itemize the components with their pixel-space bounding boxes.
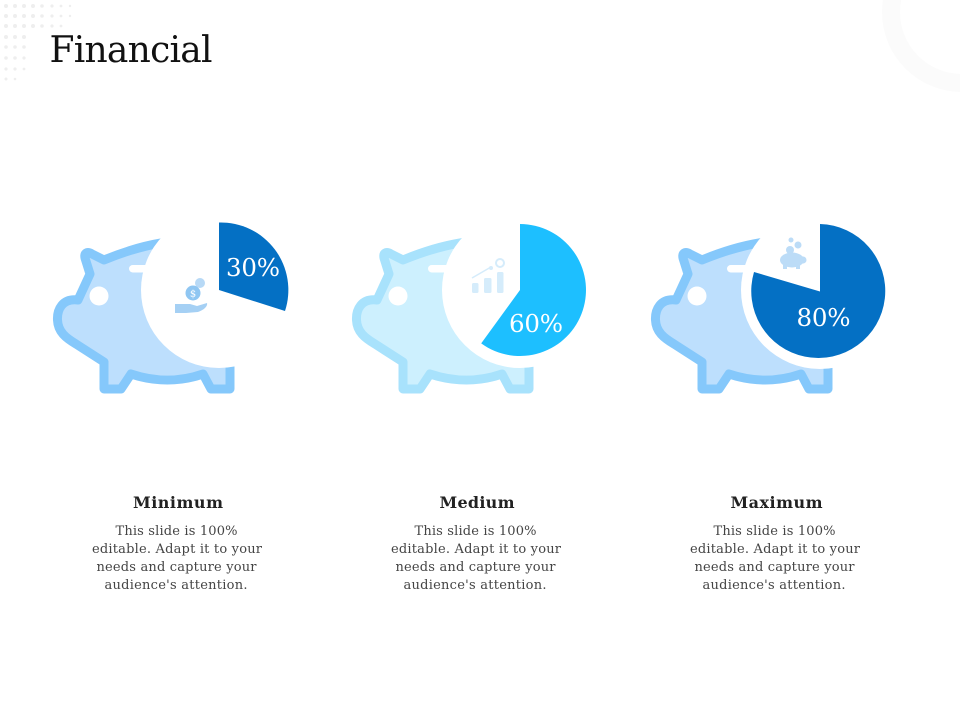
description: This slide is 100%	[116, 524, 238, 539]
description: editable. Adapt it to your	[690, 542, 861, 557]
heading: maximum: Maximum	[730, 493, 823, 512]
title: Financial	[50, 30, 212, 71]
description: editable. Adapt it to your	[92, 542, 263, 557]
value 80%: 80%	[796, 303, 850, 332]
icon: mini piggy with coins	[780, 238, 806, 269]
description: This slide is 100%	[714, 524, 836, 539]
description: audience's attention.	[404, 578, 546, 593]
description: needs and capture your	[96, 560, 257, 575]
icon: growth bars	[472, 259, 504, 293]
panel: minimum	[57, 212, 297, 593]
description: audience's attention.	[104, 578, 248, 593]
value 60%: 60%	[509, 309, 563, 338]
description: needs and capture your	[396, 560, 556, 575]
icon: coins in hand: $	[190, 289, 196, 300]
description	[391, 524, 562, 593]
heading: minimum: Minimum	[133, 493, 223, 512]
icon: coins in hand	[175, 278, 207, 313]
piggy bank	[655, 211, 899, 389]
description	[92, 524, 263, 593]
value 30%: 30%	[226, 253, 280, 282]
decorative ring	[891, 0, 960, 83]
pie slice 30%	[219, 222, 288, 311]
pie slice 80%	[751, 224, 885, 358]
panel: maximum	[655, 211, 899, 593]
heading: medium: Medium	[440, 493, 515, 512]
piggy bank	[356, 212, 598, 389]
description: needs and capture your	[694, 560, 855, 575]
pie slice 60%	[481, 224, 586, 356]
description: audience's attention.	[702, 578, 846, 593]
description: editable. Adapt it to your	[391, 542, 562, 557]
description: This slide is 100%	[414, 524, 536, 539]
piggy bank	[57, 212, 297, 389]
description	[690, 524, 861, 593]
panel: medium	[356, 212, 598, 593]
decorative dot grid	[4, 4, 71, 80]
